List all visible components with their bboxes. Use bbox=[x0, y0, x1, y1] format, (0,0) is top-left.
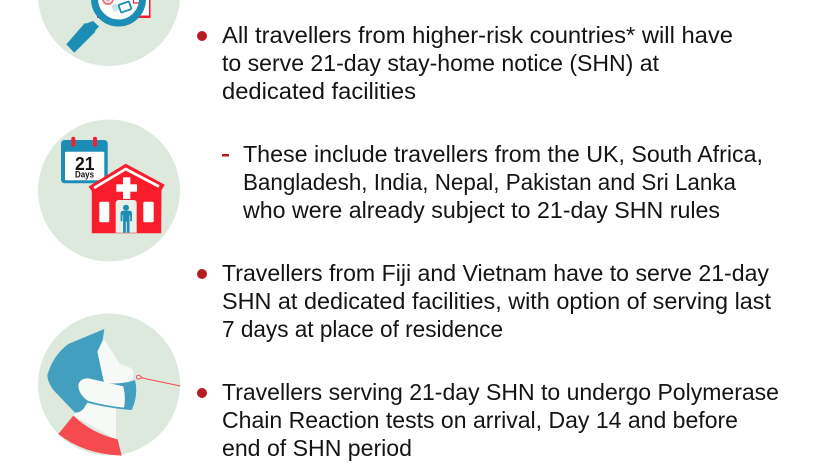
shirt bbox=[58, 416, 122, 456]
icon: masked person receiving nasal swab bbox=[38, 314, 180, 456]
icon: person bbox=[121, 205, 132, 233]
icon: 21 days calendar: Days bbox=[75, 170, 94, 180]
bullet block: PCR tests bbox=[197, 379, 779, 461]
hair bbox=[47, 329, 104, 413]
icon: magnifying glass over passport bbox=[38, 0, 180, 66]
sub-bullet block: countries included: These include travellers from the UK, South Africa, bbox=[243, 141, 763, 167]
bullet block: higher-risk countries: to serve 21-day stay-home notice (SHN) at bbox=[222, 50, 660, 76]
swab bbox=[141, 378, 180, 386]
bullet block: Fiji and Vietnam: Travellers from Fiji and Vietnam have to serve 21-day bbox=[222, 260, 769, 286]
bullet block: Fiji and Vietnam: SHN at dedicated facilities, with option of serving last bbox=[222, 288, 772, 314]
bullet block: PCR tests: Chain Reaction tests on arrival, Day 14 and before bbox=[222, 407, 738, 433]
icon: 21 days calendar bbox=[61, 137, 108, 183]
icon: house with medical cross bbox=[89, 164, 164, 233]
icon: 21 days calendar: 21 bbox=[75, 154, 94, 174]
icon: calendar and quarantine facility bbox=[38, 120, 180, 262]
sub-bullet block: countries included bbox=[222, 141, 763, 223]
bullet block: higher-risk countries: All travellers from higher-risk countries* will have bbox=[222, 22, 733, 48]
sub-bullet block: countries included: Bangladesh, India, Nepal, Pakistan and Sri Lanka bbox=[243, 169, 736, 195]
bullet block: PCR tests: end of SHN period bbox=[222, 435, 412, 461]
bullet block: higher-risk countries bbox=[197, 22, 733, 104]
bullet block: higher-risk countries: dedicated facilities bbox=[222, 78, 416, 104]
face and neck bbox=[73, 339, 134, 439]
bullet block: Fiji and Vietnam: 7 days at place of residence bbox=[222, 316, 503, 342]
face mask bbox=[77, 377, 136, 410]
sub-bullet block: countries included: who were already subject to 21-day SHN rules bbox=[242, 197, 720, 223]
ear strap bbox=[78, 378, 125, 408]
bullet block: Fiji and Vietnam bbox=[197, 260, 772, 342]
bullet block: PCR tests: Travellers serving 21-day SHN to undergo Polymerase bbox=[222, 379, 779, 405]
